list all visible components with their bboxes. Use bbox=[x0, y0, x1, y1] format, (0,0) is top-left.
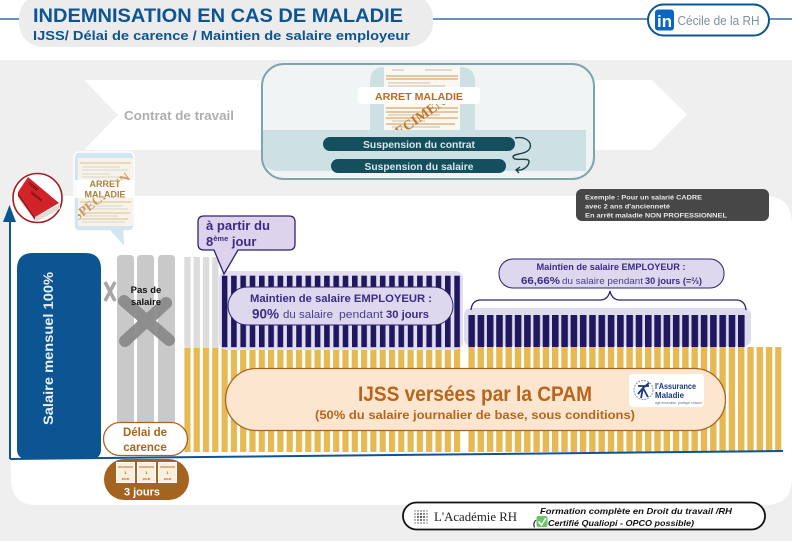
icon: calendars: JOUR bbox=[164, 477, 171, 481]
logo: Assurance Maladie: Maladie bbox=[655, 391, 685, 400]
pill: waiting period: carence bbox=[123, 442, 167, 454]
pill: waiting period bbox=[104, 422, 188, 456]
full salary bar bbox=[17, 253, 101, 459]
pill: suspension du salaire bbox=[331, 159, 506, 173]
pill: employer 90%: du salaire bbox=[283, 309, 333, 321]
suspension panel bbox=[262, 64, 594, 179]
title block bbox=[19, 0, 433, 47]
callout: sick note: SPECIMEN bbox=[70, 169, 133, 223]
example note: avec 2 ans d'ancienneté bbox=[585, 204, 670, 210]
bracket bbox=[471, 291, 746, 310]
purple backdrop: 66% period bbox=[464, 308, 751, 346]
footer badge: ( bbox=[533, 518, 537, 528]
icon: swirl arrow bbox=[513, 138, 530, 173]
pill: employer 66%: Maintien de salaire EMPLOYEUR : bbox=[536, 262, 686, 272]
pill: employer 90%: 90% bbox=[252, 306, 279, 322]
callout: sick note: ARRET bbox=[90, 179, 121, 189]
document: sick note bbox=[384, 67, 460, 130]
icon: small cross bbox=[105, 282, 115, 301]
pill: 3 days bbox=[104, 459, 189, 500]
icon: labour code book: CODE bbox=[27, 181, 40, 192]
icon: labour code book: TRAVAIL bbox=[29, 191, 44, 204]
pill: employer 90%: pendant bbox=[339, 309, 383, 321]
pill: suspension du contrat bbox=[323, 137, 515, 151]
document: sick note: SPECIMEN bbox=[379, 95, 449, 149]
contract arrow band bbox=[84, 80, 687, 150]
LinkedIn badge bbox=[648, 4, 769, 36]
title block: IJSS/ Délai de carence / Maintien de salaire employeur bbox=[33, 28, 410, 43]
full salary bar: Salaire mensuel 100% bbox=[41, 272, 56, 425]
chart panel bbox=[11, 196, 792, 505]
label: no salary bbox=[131, 285, 161, 308]
icon: calendars: 1 bbox=[166, 470, 169, 475]
pill: 3 days: 3 jours bbox=[124, 486, 160, 498]
icon: dotted grid bbox=[414, 510, 428, 524]
logo: Assurance Maladie: l'Assurance bbox=[655, 382, 696, 391]
purple backdrop: 90% period bbox=[219, 271, 463, 350]
LinkedIn badge: Cécile de la RH bbox=[678, 13, 760, 28]
pill: waiting period: Délai de bbox=[123, 427, 167, 439]
label: no salary: Pas de bbox=[131, 285, 161, 296]
label: no salary: salaire bbox=[131, 297, 161, 308]
pill: employer 90% bbox=[228, 287, 453, 325]
LinkedIn badge: in bbox=[657, 12, 672, 31]
header line bbox=[0, 18, 792, 20]
axes bbox=[3, 205, 783, 459]
navy bars: 90% period bbox=[222, 276, 461, 347]
icon: calendars: 1 bbox=[145, 470, 148, 475]
callout: from 8th day bbox=[198, 216, 295, 274]
example note bbox=[576, 189, 769, 221]
navy bars: 66% period bbox=[468, 315, 745, 347]
pill: suspension du salaire: Suspension du salaire bbox=[364, 162, 474, 173]
footer badge: Certifié Qualiopi - OPCO possible) bbox=[548, 518, 694, 528]
pill: IJSS bbox=[226, 368, 726, 430]
icon: labour code book bbox=[13, 174, 62, 222]
example note: Exemple : Pour un salarié CADRE bbox=[585, 194, 702, 202]
callout: from 8th day: 8 bbox=[206, 234, 213, 249]
icon: calendars: JOUR bbox=[122, 477, 129, 481]
footer badge: L'Académie RH bbox=[434, 509, 517, 524]
callout: sick note: MALADIE bbox=[84, 190, 126, 200]
icon: large cross bbox=[124, 301, 169, 341]
pill: employer 66%: du salaire pendant bbox=[562, 276, 644, 286]
footer badge: Formation complète en Droit du travail /RH bbox=[540, 506, 733, 516]
example note: En arrêt maladie NON PROFESSIONNEL bbox=[585, 212, 727, 220]
label: arret maladie: ARRET MALADIE bbox=[375, 91, 463, 103]
callout: sick note bbox=[70, 152, 134, 248]
label: arret maladie bbox=[358, 87, 480, 104]
icon: check mark bbox=[536, 516, 548, 527]
pill: employer 90%: Maintien de salaire EMPLOYEUR : bbox=[250, 293, 432, 305]
pill: employer 66%: 66,66% bbox=[521, 275, 561, 287]
callout: from 8th day: à partir du bbox=[206, 218, 270, 233]
grey bars bbox=[184, 257, 218, 348]
callout: from 8th day: jour bbox=[228, 234, 256, 249]
gold bars: IJSS bbox=[184, 347, 781, 452]
pill: IJSS: (50% du salaire journalier de base, sous conditions) bbox=[315, 408, 635, 422]
logo: Assurance Maladie bbox=[629, 374, 704, 407]
icon: calendars bbox=[116, 462, 176, 482]
pill: employer 90%: 30 jours bbox=[386, 309, 429, 321]
pill: suspension du contrat: Suspension du contrat bbox=[363, 140, 476, 151]
waiting period bars bbox=[117, 255, 175, 424]
contract arrow band: Contrat de travail bbox=[124, 109, 234, 123]
footer badge bbox=[403, 502, 765, 530]
pill: IJSS: IJSS versées par la CPAM bbox=[358, 383, 592, 406]
icon: calendars: 1 bbox=[124, 470, 127, 475]
logo: Assurance Maladie: agir ensemble, protéger chacun bbox=[655, 401, 702, 405]
pill: employer 66% bbox=[499, 259, 724, 288]
callout: from 8th day: ème bbox=[213, 234, 228, 243]
icon: calendars: JOUR bbox=[143, 477, 150, 481]
title block: INDEMNISATION EN CAS DE MALADIE bbox=[33, 5, 403, 27]
pill: employer 66%: 30 jours (=⅔) bbox=[645, 276, 702, 286]
